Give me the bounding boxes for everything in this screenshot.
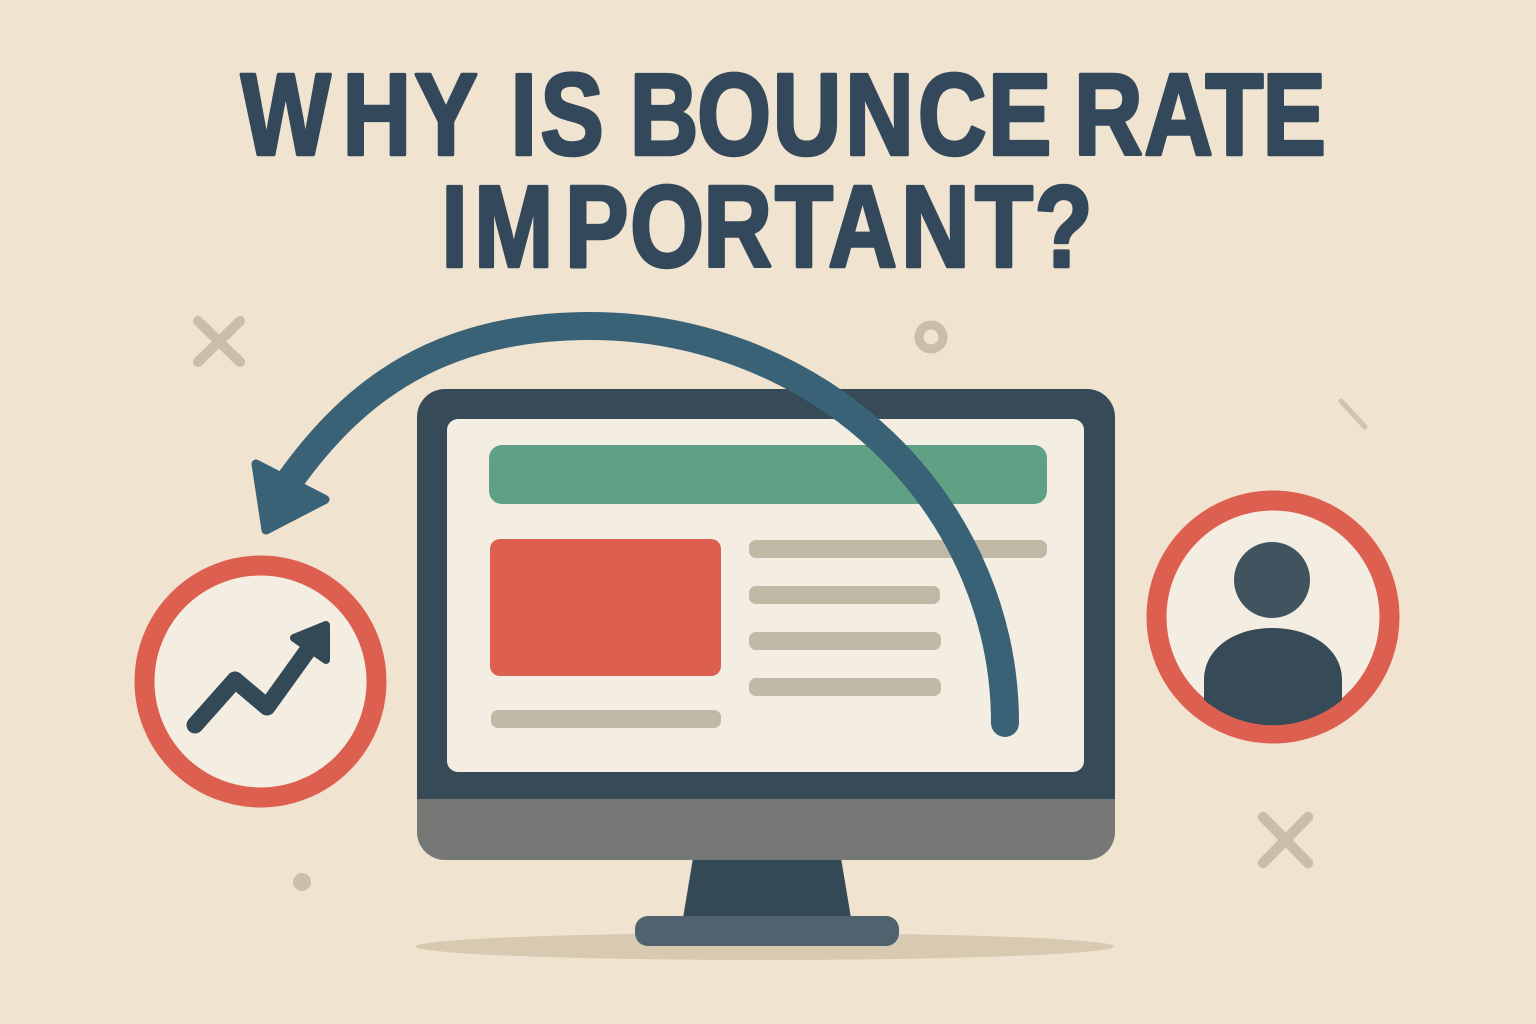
decoration: ring	[919, 325, 943, 349]
user body	[1204, 628, 1342, 725]
monitor base	[635, 916, 899, 946]
monitor chin	[417, 795, 1115, 860]
user head	[1234, 542, 1310, 618]
page text lines	[491, 540, 1047, 728]
page header bar	[489, 445, 1047, 504]
decoration: dot	[293, 873, 311, 891]
decoration: x mark bottom right	[1263, 817, 1308, 863]
icon: user badge	[1156, 500, 1390, 734]
trend arrowhead	[294, 625, 326, 660]
monitor stand	[683, 858, 851, 918]
title: IMPORTANT?	[441, 163, 1093, 292]
page image block	[490, 539, 721, 676]
monitor bezel	[417, 389, 1115, 799]
title	[241, 51, 1326, 292]
monitor	[417, 389, 1115, 946]
monitor screen	[447, 419, 1084, 772]
decoration: x mark top left	[198, 321, 240, 362]
icon: growth chart badge	[144, 566, 376, 798]
monitor shadow	[416, 933, 1114, 960]
bounce arrow	[256, 326, 1005, 723]
decoration: dash	[1341, 401, 1365, 427]
title: WHY IS BOUNCE RATE	[241, 51, 1326, 180]
trend line	[195, 650, 308, 725]
